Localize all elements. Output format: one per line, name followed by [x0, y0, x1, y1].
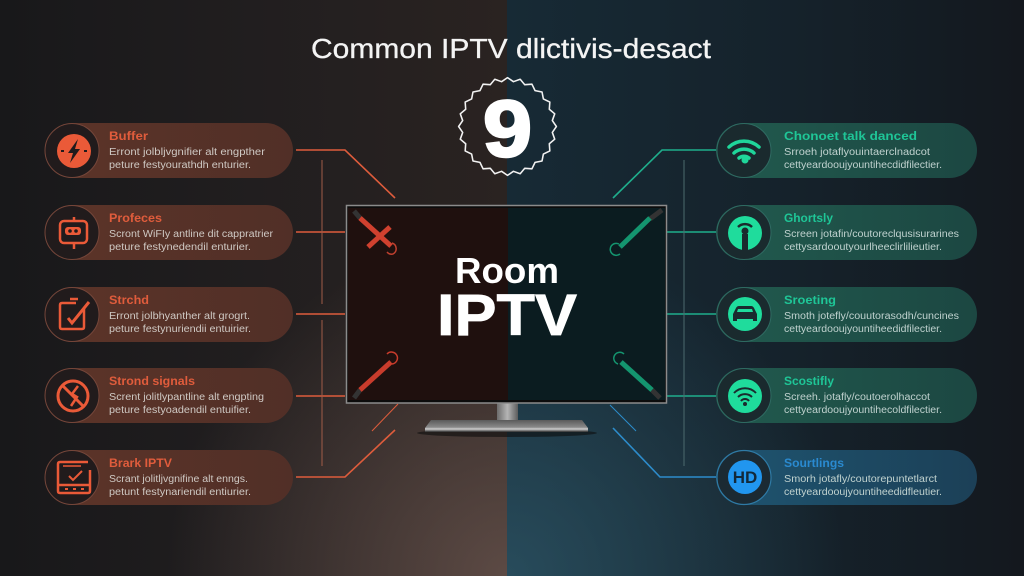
corner mark: bottom right [614, 352, 660, 398]
panel: Brark IPTV: Scrant jolitljvgnifine alt enngs. [109, 474, 248, 485]
panel: Sourtlings: Smorh jotafly/coutorepuntetlarct [784, 474, 937, 485]
connectors: right [610, 150, 716, 477]
screen text: Room: Room [455, 250, 559, 291]
panel: Profeces [45, 205, 293, 260]
panel: Ghortsly: Screen jotafin/coutoreclqusisurarines [784, 229, 959, 240]
panel: Sourtlings: cettyeardooujyountiheedidfleutier. [784, 487, 942, 498]
TV set [346, 206, 666, 437]
panel: Chonoet talk danced: Chonoet talk danced [784, 131, 917, 143]
panel: Profeces: peture festynedendil enturier. [109, 242, 251, 253]
background: left warm half [0, 0, 507, 576]
panel: Profeces: Profeces [109, 213, 162, 225]
panel: Strchd: Erront jolbhyanther alt grogrt. [109, 311, 250, 322]
icon: wifi [729, 141, 759, 164]
badge: number 9 [459, 78, 556, 175]
panel: Buffer: Erront jolbljvgnifier alt engpther [109, 147, 266, 158]
panel: Ghortsly [716, 205, 977, 260]
panel: Scostifly: Screeh. jotafly/coutoerolhaccot [784, 392, 930, 403]
panel: Strond signals [45, 368, 293, 423]
corner mark: top left [354, 211, 396, 254]
icon: HD [728, 460, 762, 494]
panel: Brark IPTV: Brark IPTV [109, 458, 172, 470]
panel: Ghortsly: Ghortsly [784, 213, 834, 225]
TV screen right [508, 208, 665, 400]
panel: Strond signals: Scrent jolitlypantline alt engpting [109, 392, 264, 403]
panel: Sourtlings [716, 450, 977, 505]
TV screen left [348, 208, 508, 400]
screen text: IPTV: IPTV [437, 283, 577, 348]
panel: Buffer [45, 123, 293, 178]
corner mark: top right [610, 210, 662, 255]
icon: wifi badge [728, 379, 762, 413]
panel: Scostifly [716, 368, 977, 423]
panel: Buffer: Buffer [109, 131, 149, 143]
panel: Chonoet talk danced: cettyeardooujyountihecdidfilectier. [784, 160, 942, 171]
icon: no signal [58, 381, 88, 411]
icon: tablet check [58, 462, 90, 493]
panel: Strond signals: Strond signals [109, 376, 195, 388]
panel: Buffer: peture festyourathdh enturier. [109, 160, 251, 171]
background: right cool half [507, 0, 1024, 576]
panel: Chonoet talk danced [716, 123, 977, 178]
panel: Sourtlings: Sourtlings [784, 458, 844, 470]
connectors: left [296, 150, 398, 477]
panel: Ghortsly: cettysardooutyourlheeclirlilieutier. [784, 242, 942, 253]
title: Common IPTV dlictivis-desact [311, 33, 711, 64]
panel: Sroeting: cettyeardooujyountiheedidfilectier. [784, 324, 942, 335]
icon: car [728, 297, 762, 331]
panel: Scostifly: cettyeardooujyountihecoldfilectier. [784, 405, 942, 416]
icon: antenna [728, 216, 762, 250]
TV frame [346, 206, 666, 403]
panel: Brark IPTV: petunt festynariendil entiurier. [109, 487, 251, 498]
icon: checklist [60, 299, 89, 329]
panel: Chonoet talk danced: Srroeh jotaflyouintaerclnadcot [784, 147, 930, 158]
panel: Strchd: peture festynuriendii entuirier. [109, 324, 251, 335]
TV stand [417, 403, 597, 437]
icon: bolt [57, 134, 91, 168]
icon: device [60, 217, 87, 249]
panel: Brark IPTV [45, 450, 293, 505]
badge: number 9: 9 [483, 84, 532, 173]
icon: HD: HD [733, 468, 757, 487]
panel: Strond signals: peture festyoadendil entuifier. [109, 405, 251, 416]
corner mark: bottom left [354, 352, 397, 398]
panel: Sroeting [716, 287, 977, 342]
panel: Scostifly: Scostifly [784, 376, 835, 388]
panel: Sroeting: Smoth jotefly/couutorasodh/cuncines [784, 311, 959, 322]
panel: Profeces: Scront WiFIy antline dit cappratrier [109, 229, 274, 240]
panel: Sroeting: Sroeting [784, 295, 836, 307]
panel: Strchd: Strchd [109, 295, 149, 307]
panel: Strchd [45, 287, 293, 342]
